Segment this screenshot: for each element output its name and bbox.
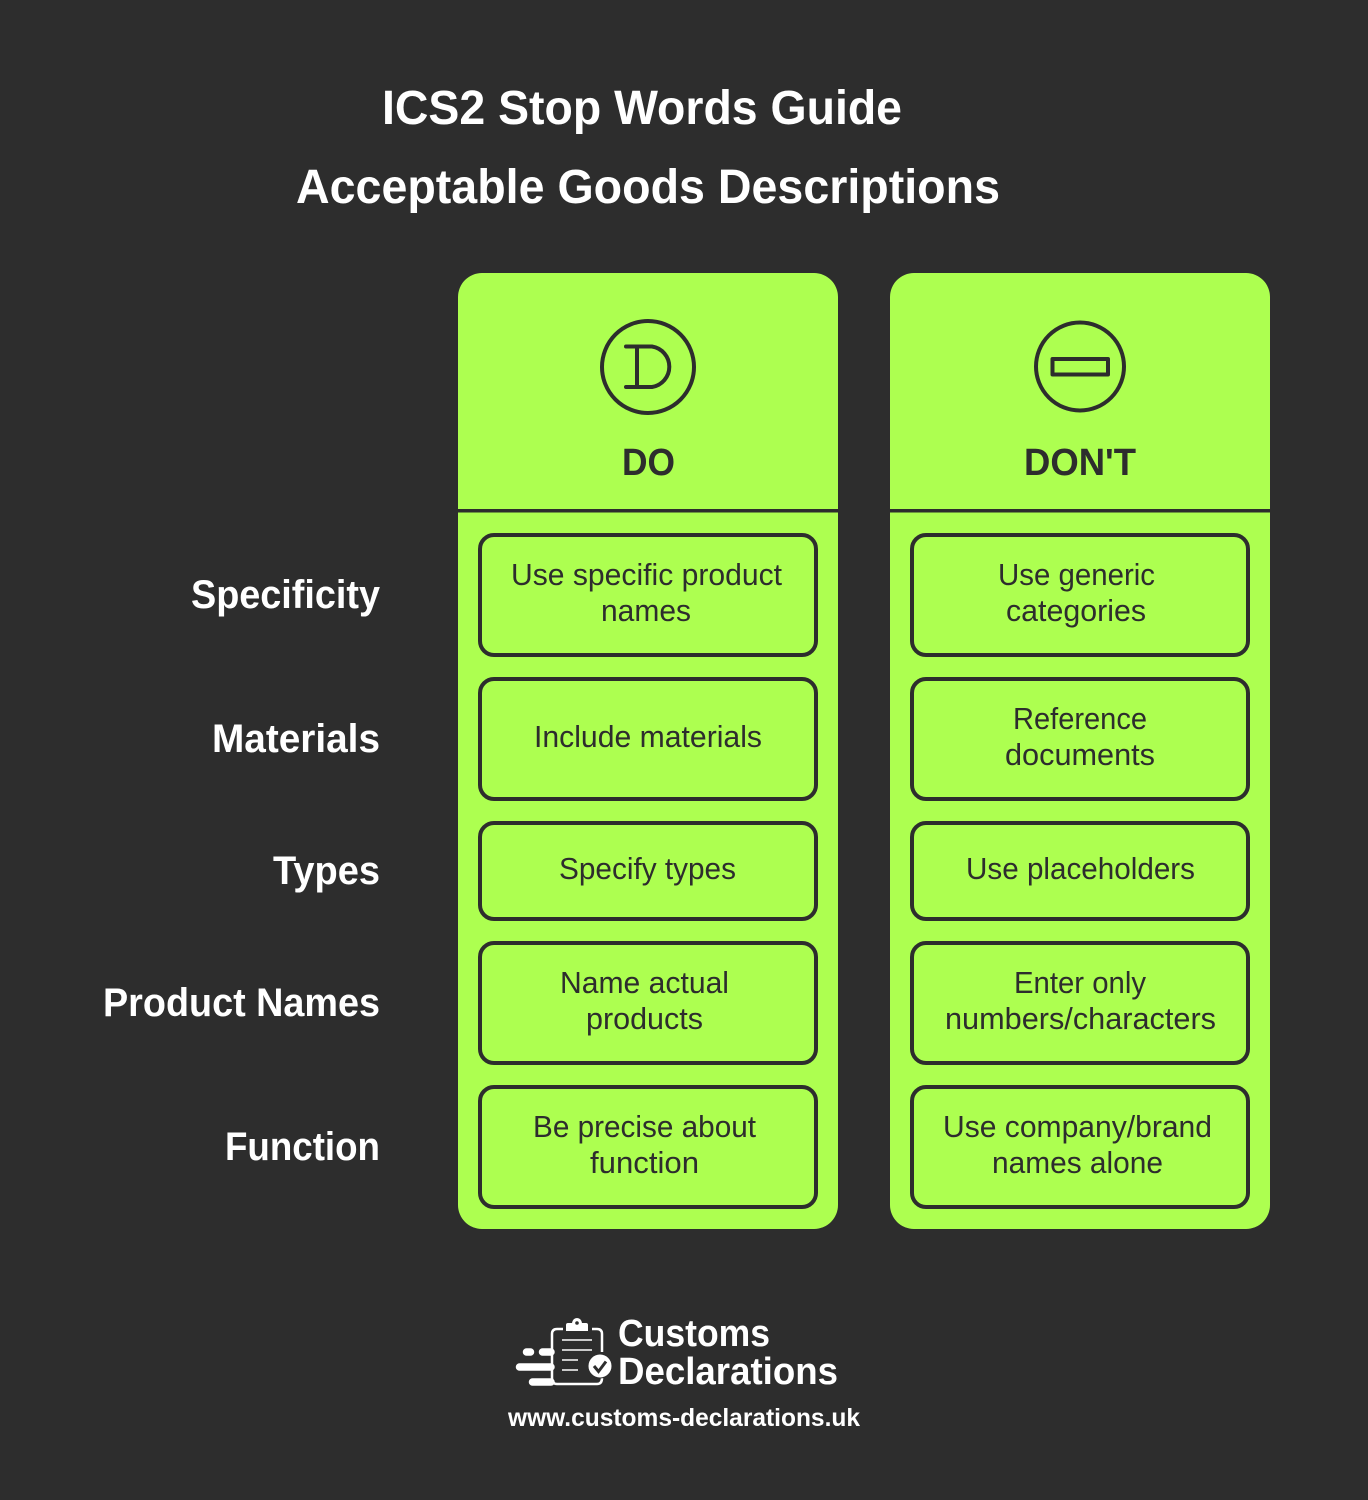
cell: Use placeholders: Use placeholders [966, 851, 1195, 886]
logo: Customs Declarations [507, 1313, 860, 1432]
icon: no-entry circle [1036, 322, 1124, 410]
panel: DO column [458, 273, 838, 1229]
title [296, 82, 1000, 214]
cell: Specify types [480, 823, 816, 919]
cell: Use generic categories: categories [1006, 593, 1146, 628]
cell: Use generic categories [912, 535, 1248, 655]
cell: Use generic categories: Use generic [998, 557, 1155, 592]
cell: Be precise about function: function [590, 1145, 699, 1180]
row label: Types: Types [273, 849, 380, 893]
icon: D in circle [602, 321, 694, 413]
panel: DON'T column [890, 273, 1270, 1229]
title: Acceptable Goods Descriptions [296, 161, 1000, 214]
cell: Be precise about function: Be precise about [533, 1109, 756, 1144]
cell: Use placeholders [912, 823, 1248, 919]
cell: Name actual products: products [586, 1001, 703, 1036]
cell: Name actual products: Name actual [560, 965, 729, 1000]
cell: Use specific product names: Use specific product [511, 557, 782, 592]
heading: DO: DO [622, 442, 675, 484]
row label: Specificity: Specificity [191, 573, 381, 617]
cell: Name actual products [480, 943, 816, 1063]
cell: Enter only numbers/characters: numbers/characters [945, 1001, 1216, 1036]
row label: Function: Function [225, 1125, 380, 1169]
heading: DON'T: DON'T [1024, 442, 1136, 484]
cell: Use specific product names: names [601, 593, 691, 628]
cell: Be precise about function [480, 1087, 816, 1207]
website url: www.customs-declarations.uk [507, 1404, 860, 1432]
row label: Materials: Materials [212, 717, 380, 761]
cell: Enter only numbers/characters: Enter only [1014, 965, 1146, 1000]
cell: Include materials [480, 679, 816, 799]
logo wordmark: Customs [618, 1313, 770, 1355]
cell: Use company/brand names alone: Use company/brand [943, 1109, 1212, 1144]
cell: Reference documents: Reference [1013, 701, 1147, 736]
icon: clipboard with check [520, 1318, 612, 1384]
cell: Specify types: Specify types [559, 851, 736, 886]
row label: Product Names: Product Names [103, 981, 380, 1025]
cell: Reference documents: documents [1005, 737, 1155, 772]
cell: Reference documents [912, 679, 1248, 799]
cell: Enter only numbers/characters [912, 943, 1248, 1063]
title: ICS2 Stop Words Guide [382, 82, 902, 135]
cell: Use specific product names [480, 535, 816, 655]
cell: Include materials: Include materials [534, 719, 762, 754]
cell: Use company/brand names alone [912, 1087, 1248, 1207]
cell: Use company/brand names alone: names alone [992, 1145, 1163, 1180]
logo: Customs Declarations: Declarations [618, 1351, 838, 1393]
